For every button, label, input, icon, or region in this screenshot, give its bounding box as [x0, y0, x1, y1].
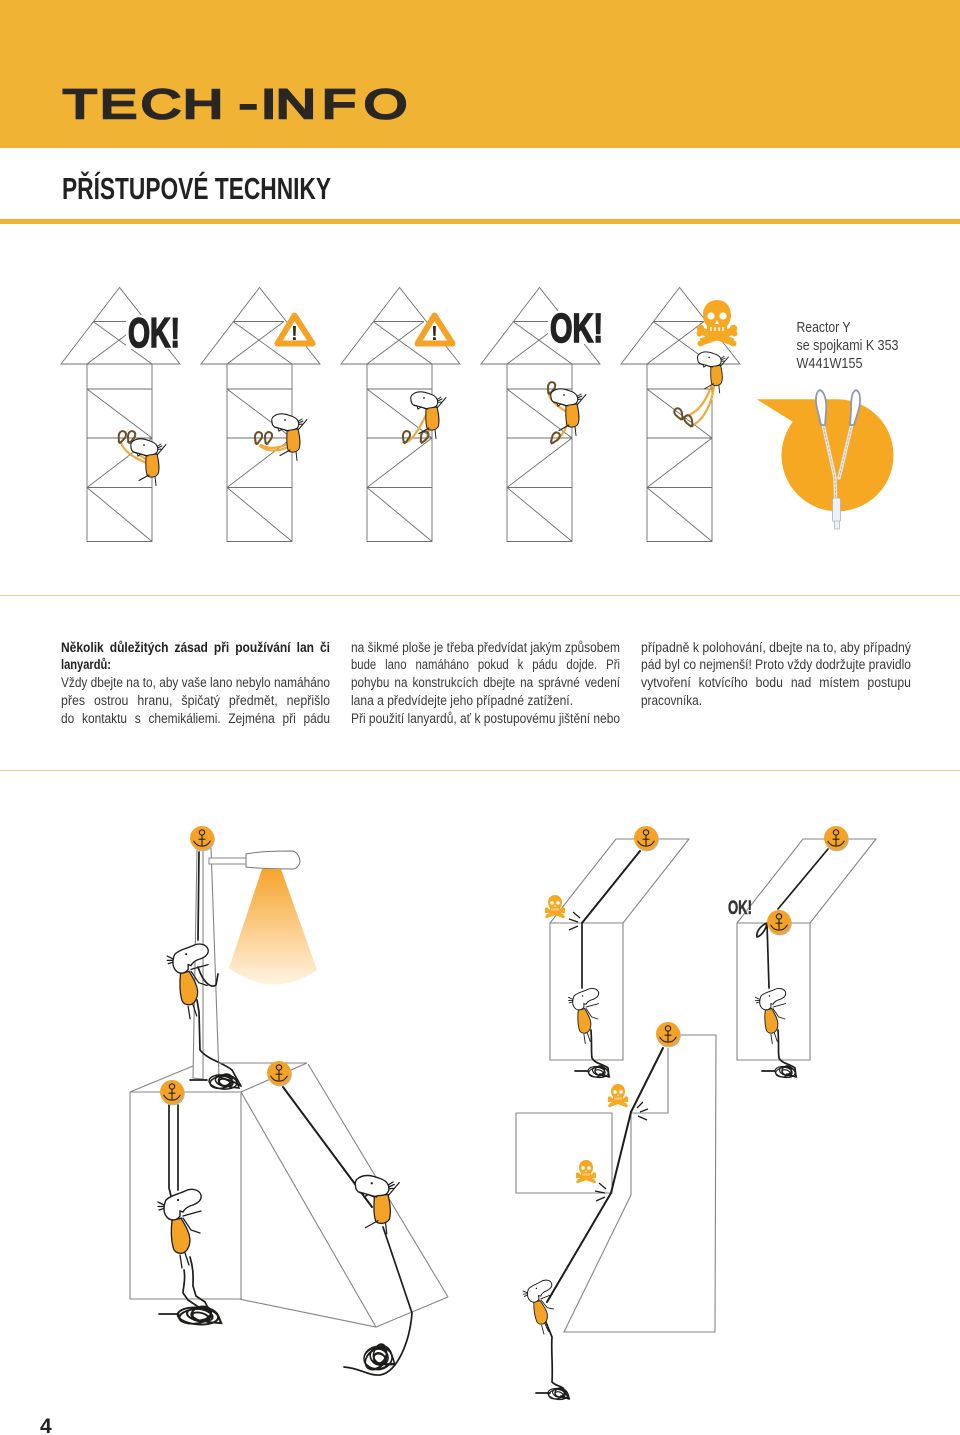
text: product name: W441W155	[796, 356, 862, 372]
rope	[190, 852, 241, 1086]
panel: street lamp climber	[167, 826, 317, 1090]
text column 1	[61, 640, 330, 726]
header band	[0, 0, 960, 148]
panel: tower scene 1, OK: OK!	[128, 309, 180, 356]
text column 1: lanyardů:	[61, 657, 111, 672]
panel: tower scene 4, OK	[481, 288, 605, 542]
text: product name: se spojkami K 353	[796, 338, 898, 354]
callout: product speech bubble	[757, 390, 894, 529]
text column 1: přes ostrou hranu, špičatý předmět, nepřišlo	[61, 693, 330, 708]
divider top	[0, 595, 960, 596]
title: Tech-Info: TECH-INFO	[63, 82, 407, 127]
icon: Reactor Y lanyard	[816, 390, 860, 529]
panel: tower scene 4, OK: OK!	[550, 305, 603, 351]
text column 1: Několik důležitých zásad při používání lan či	[61, 640, 330, 655]
divider bottom	[0, 770, 960, 771]
text column 3: pád byl co nejmenší! Proto vždy dodržujte pravidlo	[641, 657, 911, 672]
panel: tower scene 2, warning	[201, 288, 320, 542]
text column 2: pohybu na konstrukcích dbejte na správné vedení	[351, 675, 620, 690]
text column 2: na šikmé ploše je třeba předvídat jakým způsobem	[351, 640, 620, 655]
text column 1: Vždy dbejte na to, aby vaše lano nebylo namáháno	[61, 675, 330, 690]
panel: wall climber	[130, 1063, 307, 1326]
heading rule	[0, 219, 960, 224]
text column 3: pracovníka.	[641, 693, 702, 708]
heading: Přístupové techniky: PŘÍSTUPOVÉ TECHNIKY	[62, 170, 331, 206]
panel: tower scene 1, OK	[61, 288, 183, 542]
panel: tower scene 3, warning: !	[431, 323, 438, 345]
panel: tower scene 2, warning: !	[291, 323, 298, 345]
text column 2: lana a předvídejte jeho případné zatížení.	[351, 693, 573, 708]
panel: tower scene 5, danger	[621, 288, 740, 542]
text column 2: bude lano namáháno pokud k pádu dojde. Při	[351, 657, 620, 672]
text column 3: případně k polohování, dbejte na to, aby případný	[641, 640, 911, 655]
text column 3	[641, 640, 911, 708]
light cone	[229, 869, 317, 985]
panel: edge OK: OK!	[728, 898, 752, 919]
text column 2	[351, 640, 620, 726]
text column 3: vytvoření kotvícího bodu nad místem postupu	[641, 675, 911, 690]
panel: tower scene 3, warning	[341, 288, 460, 542]
panel: edge OK	[728, 826, 876, 1079]
text column 2: Při použití lanyardů, ať k postupovému jištění nebo	[351, 711, 620, 726]
panel: overhang with danger points	[516, 1022, 716, 1401]
text: product name: Reactor Y	[796, 320, 851, 336]
panel: slope climber	[239, 1061, 448, 1375]
panel: edge danger	[545, 826, 689, 1079]
text: product name	[796, 320, 898, 372]
text column 1: do kontaktu s chemikáliemi. Zejména při pádu	[61, 711, 330, 726]
